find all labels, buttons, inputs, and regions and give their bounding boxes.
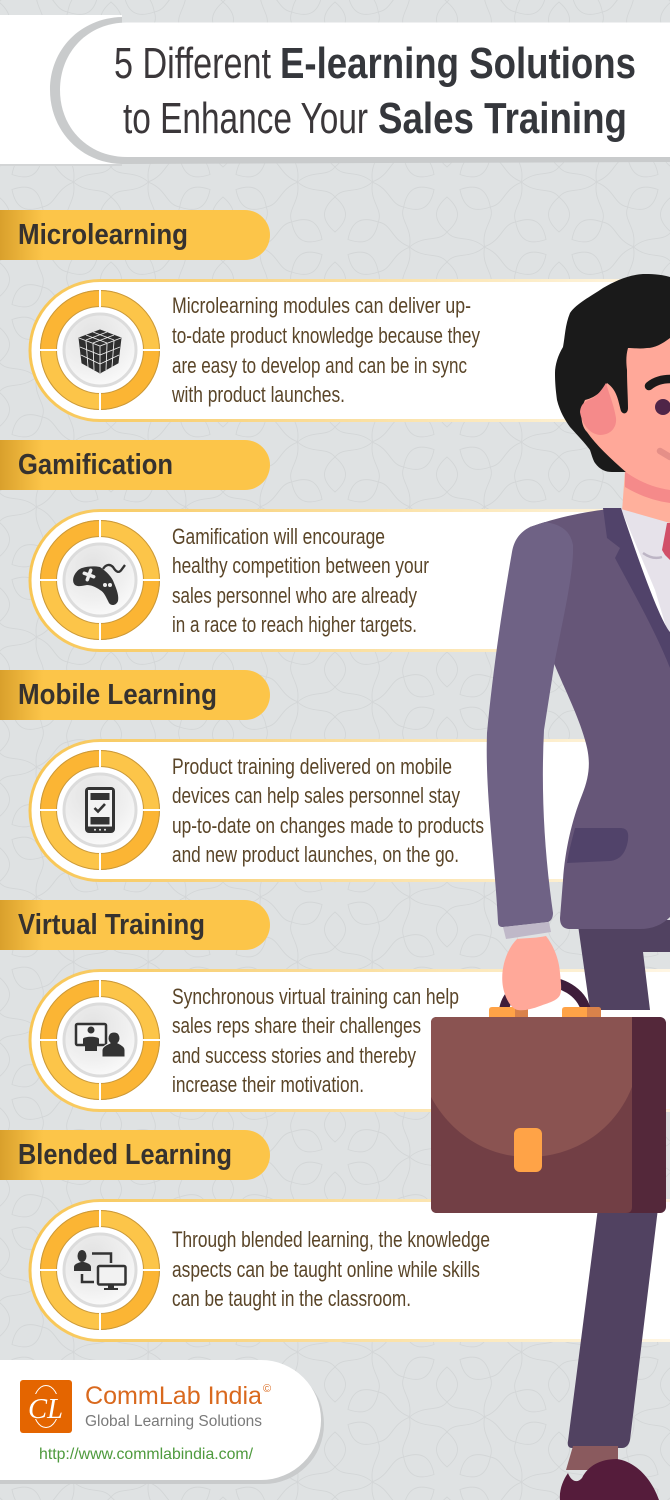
- description text: [172, 984, 459, 1097]
- trouser leg: [568, 920, 670, 1448]
- jacket pocket: [567, 828, 628, 863]
- description text: and success stories and thereby: [172, 1043, 416, 1068]
- company name: CommLab India: [85, 1382, 262, 1410]
- title text: 5 Different: [114, 39, 271, 88]
- description text: Through blended learning, the knowledge: [172, 1227, 490, 1252]
- description text: are easy to develop and can be in sync: [172, 353, 467, 378]
- icon: mobile phone: [85, 787, 115, 833]
- description text: to-date product knowledge because they: [172, 323, 480, 348]
- description text: devices can help sales personnel stay: [172, 783, 460, 808]
- title text: Sales Training: [378, 94, 627, 143]
- face: [581, 338, 670, 490]
- heading pill: Blended Learning: [18, 1139, 232, 1171]
- description text: in a race to reach higher targets.: [172, 612, 417, 637]
- heading pill: [0, 440, 270, 490]
- tagline: Global Learning Solutions: [85, 1413, 262, 1430]
- description text: [171, 293, 480, 407]
- description text: sales personnel who are already: [172, 583, 417, 608]
- heading pill: Microlearning: [18, 219, 188, 251]
- jacket body: [530, 508, 670, 929]
- icon ring: [39, 289, 161, 411]
- section: Blended Learning: [0, 1130, 670, 1340]
- heading pill: Gamification: [18, 449, 173, 481]
- logo mark: CL: [28, 1394, 63, 1425]
- description text: [172, 1227, 490, 1311]
- briefcase handle: [504, 982, 586, 1010]
- description text: Synchronous virtual training can help: [172, 984, 459, 1009]
- section: Mobile Learning: [0, 670, 670, 880]
- logo mark: [20, 1380, 72, 1433]
- icon ring: [39, 1209, 161, 1331]
- eye: [655, 399, 670, 415]
- panel: [30, 970, 670, 1110]
- panel: [30, 1200, 670, 1340]
- description text: Microlearning modules can deliver up-: [172, 293, 471, 318]
- heading pill: Virtual Training: [18, 909, 205, 941]
- section: Virtual Training: [0, 900, 670, 1110]
- neck: [622, 470, 670, 530]
- icon: video presenter and viewer: [76, 1024, 125, 1057]
- section: Gamification: [0, 440, 670, 650]
- nose mark: [660, 451, 670, 457]
- heading pill: [0, 670, 270, 720]
- icon ring: [39, 979, 161, 1101]
- icon ring: [39, 519, 161, 641]
- description text: Gamification will encourage: [172, 524, 385, 549]
- description text: sales reps share their challenges: [172, 1013, 421, 1038]
- briefcase: [431, 1017, 666, 1213]
- heading pill: [0, 900, 270, 950]
- icon ring: [39, 749, 161, 871]
- title text: [114, 39, 636, 143]
- hair: [555, 274, 670, 472]
- ear: [580, 383, 616, 435]
- shirt and tie: [621, 509, 670, 640]
- description text: and new product launches, on the go.: [172, 842, 459, 867]
- panel: [30, 740, 670, 880]
- description text: Product training delivered on mobile: [172, 754, 452, 779]
- panel: [30, 510, 670, 650]
- icon: game controller: [73, 565, 125, 605]
- title banner: [0, 15, 670, 166]
- section: Microlearning: [0, 210, 670, 420]
- description text: [172, 754, 484, 867]
- heading pill: Mobile Learning: [18, 679, 217, 711]
- heading pill: [0, 210, 270, 260]
- eyebrow: [649, 379, 670, 386]
- hand: [502, 936, 561, 1010]
- icon: person and monitor: [74, 1250, 126, 1290]
- panel: [30, 280, 670, 420]
- description text: can be taught in the classroom.: [172, 1286, 411, 1311]
- footer logo panel: [0, 1360, 324, 1484]
- description text: increase their motivation.: [172, 1072, 364, 1097]
- copyright mark: ©: [263, 1383, 271, 1395]
- description text: healthy competition between your: [172, 553, 429, 578]
- description text: with product launches.: [171, 382, 345, 407]
- ankle and shoe: [560, 1446, 659, 1500]
- briefcase tabs: [489, 1007, 601, 1017]
- jacket lapel: [603, 508, 670, 668]
- title text: to Enhance Your: [123, 94, 368, 143]
- heading pill: [0, 1130, 270, 1180]
- description text: up-to-date on changes made to products: [172, 813, 484, 838]
- website url: http://www.commlabindia.com/: [39, 1446, 254, 1463]
- jacket sleeve: [487, 522, 573, 927]
- description text: [172, 524, 429, 637]
- description text: aspects can be taught online while skills: [172, 1257, 480, 1282]
- shirt cuff: [503, 922, 551, 939]
- icon: cube: [79, 330, 121, 373]
- illustration: salesman with briefcase: [431, 274, 670, 1500]
